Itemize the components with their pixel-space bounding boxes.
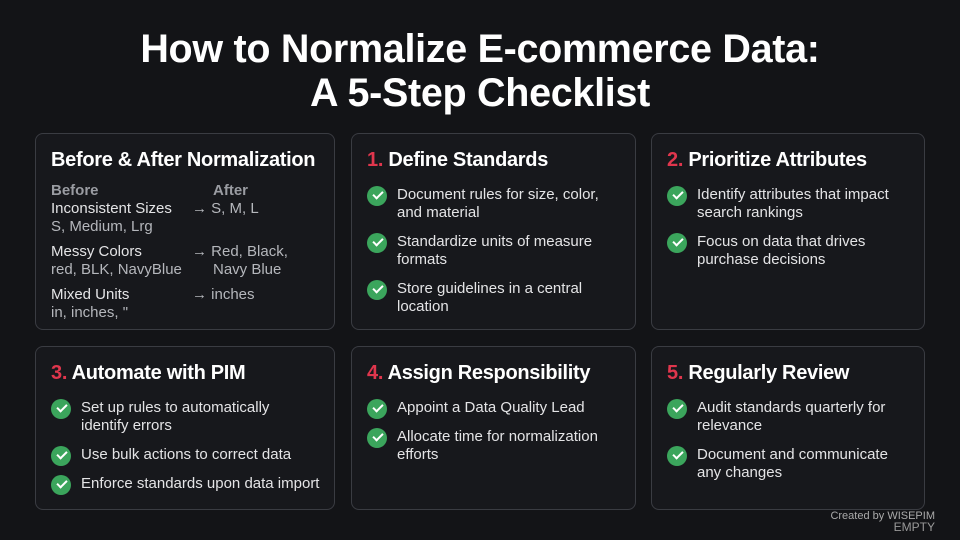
- comparison table: Mixed Units: [51, 286, 129, 303]
- comparison table: Before: [51, 182, 99, 199]
- comparison table: [51, 182, 288, 321]
- checklist: step 3: Use bulk actions to correct data: [81, 446, 291, 463]
- checklist: step 1: Store guidelines in a central location: [397, 280, 582, 315]
- comparison table: Messy Colors: [51, 243, 142, 260]
- panel: before & after: [35, 133, 335, 330]
- heading: step 1: 1. Define Standards: [367, 149, 548, 171]
- comparison table: red, BLK, NavyBlue: [51, 261, 182, 278]
- comparison table: S, Medium, Lrg: [51, 218, 153, 235]
- checklist: step 4: [367, 399, 598, 463]
- checklist: step 1: Standardize units of measure formats: [397, 233, 592, 268]
- checklist: step 4: Allocate time for normalization efforts: [397, 428, 598, 463]
- footer credit: [830, 510, 935, 534]
- checklist: step 2: [667, 186, 889, 268]
- checklist: step 4: Appoint a Data Quality Lead: [397, 399, 585, 416]
- title: How to Normalize E-commerce Data:: [140, 27, 820, 71]
- comparison table: → Red, Black,: [192, 243, 288, 260]
- heading: step 3: 3. Automate with PIM: [51, 362, 245, 384]
- title: [140, 27, 820, 115]
- checklist: step 5: [667, 399, 888, 481]
- comparison table: Inconsistent Sizes: [51, 200, 172, 217]
- checklist: step 3: Set up rules to automatically: [81, 399, 269, 416]
- checklist: step 3: [51, 399, 320, 495]
- footer credit: EMPTY: [894, 520, 935, 534]
- comparison table: Navy Blue: [213, 261, 281, 278]
- comparison table: After: [213, 182, 248, 199]
- panel: step 2: [651, 133, 925, 330]
- footer credit: Created by WISEPIM: [830, 510, 935, 522]
- checklist: step 2: Focus on data that drives purchase decisions: [697, 233, 865, 268]
- panel: step 1: [351, 133, 636, 330]
- checklist: step 3: identify errors: [81, 417, 172, 434]
- comparison table: → inches: [192, 286, 255, 303]
- checklist: step 5: Document and communicate any changes: [697, 446, 888, 481]
- heading: step 4: 4. Assign Responsibility: [367, 362, 590, 384]
- panel: step 5: [651, 346, 925, 510]
- heading: before & after: Before & After Normalization: [51, 149, 315, 171]
- heading: step 5: 5. Regularly Review: [667, 362, 849, 384]
- panel: step 3: [35, 346, 335, 510]
- comparison table: in, inches, ": [51, 304, 128, 321]
- checklist: step 1: Document rules for size, color, and material: [397, 186, 599, 221]
- checklist: step 5: Audit standards quarterly for relevance: [697, 399, 885, 434]
- heading: step 2: 2. Prioritize Attributes: [667, 149, 867, 171]
- comparison table: → S, M, L: [192, 200, 259, 217]
- title: A 5-Step Checklist: [310, 71, 650, 115]
- checklist: step 1: [367, 186, 599, 315]
- checklist: step 2: Identify attributes that impact search rankings: [697, 186, 889, 221]
- panel: step 4: [351, 346, 636, 510]
- checklist: step 3: Enforce standards upon data import: [81, 475, 319, 492]
